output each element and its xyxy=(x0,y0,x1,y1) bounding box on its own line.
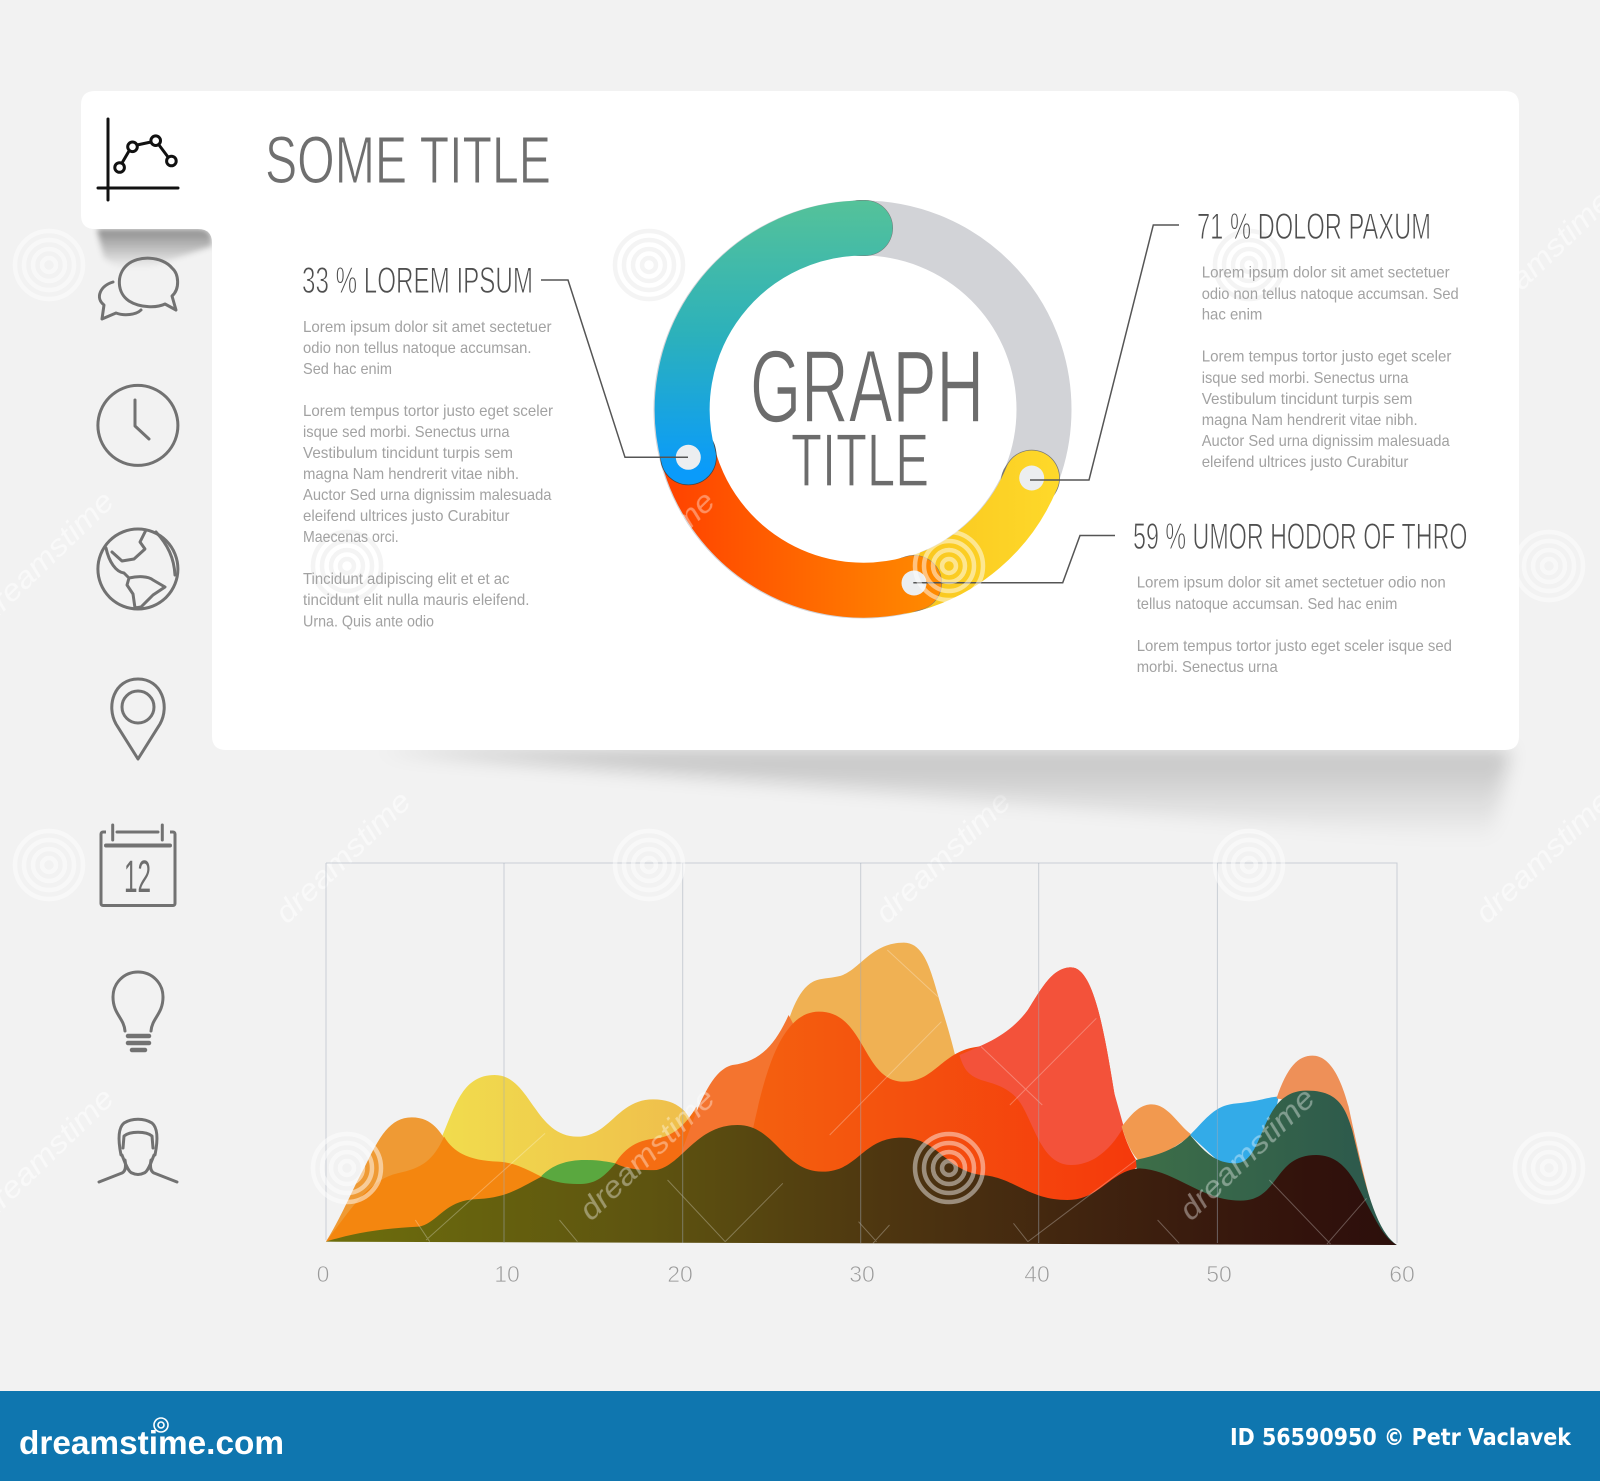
right callout: 59% umor hodor xyxy=(1133,516,1468,676)
area: orange mid xyxy=(610,1107,704,1173)
area: orange right peak xyxy=(1277,1056,1374,1213)
watermark xyxy=(15,231,1583,1227)
title word: TITLE xyxy=(791,418,929,502)
text block: left column: Urna. Quis ante odio xyxy=(303,614,434,630)
icon: globe xyxy=(98,529,178,609)
area: green overlap xyxy=(541,1160,616,1185)
panel: main card with selected tab xyxy=(81,91,1519,750)
text block: lower right column: tellus natoque accumsan. Sed hac enim xyxy=(1137,596,1397,613)
shadow under selected tab xyxy=(97,229,212,274)
area: light red orange xyxy=(675,1015,819,1173)
text block: left column: magna Nam hendrerit vitae nibh. xyxy=(303,466,519,483)
background watermark xyxy=(0,183,1600,1227)
text block: left column xyxy=(303,319,554,630)
icon: map pin xyxy=(112,679,164,759)
x axis labels: 60 xyxy=(1389,1261,1415,1287)
text block: upper right column: eleifend ultrices justo Curabitur xyxy=(1202,454,1409,471)
marker dots xyxy=(676,445,1044,596)
x axis labels: 40 xyxy=(1024,1261,1050,1287)
text block: left column: Lorem tempus tortor justo eget sceler xyxy=(303,403,554,420)
icon: clock xyxy=(98,385,178,465)
area: dark green xyxy=(1136,1091,1397,1245)
graph title xyxy=(750,329,984,502)
text block: lower right column: Lorem tempus tortor justo eget sceler isque sed xyxy=(1137,638,1452,655)
watermark: dreamstime xyxy=(572,1080,722,1227)
icon: speech bubbles xyxy=(99,258,178,319)
left callout: 33% lorem ipsum xyxy=(302,260,554,630)
area chart xyxy=(326,943,1397,1245)
heading: 71%: 71 % DOLOR PAXUM xyxy=(1197,206,1431,247)
text block: left column: isque sed morbi. Senectus urna xyxy=(303,424,510,441)
footer logo spiral xyxy=(154,1418,168,1432)
leader lines xyxy=(541,225,1179,583)
x axis labels: 10 xyxy=(494,1261,520,1287)
area: strong red orange xyxy=(750,967,1140,1207)
calendar date: 12 xyxy=(124,851,151,902)
text block: upper right column: Lorem ipsum dolor sit amet sectetuer xyxy=(1202,265,1450,282)
donut chart xyxy=(676,228,1044,595)
area: yellow xyxy=(441,1075,693,1180)
watermark strokes over chart xyxy=(415,950,1367,1244)
text block: upper right column xyxy=(1202,265,1459,471)
text block: upper right column: odio non tellus natoque accumsan. Sed xyxy=(1202,286,1459,303)
text block: upper right column: Vestibulum tincidunt turpis sem xyxy=(1202,391,1412,408)
heading: 33%: 33 % LOREM IPSUM xyxy=(302,260,533,301)
text block: left column: eleifend ultrices justo Curabitur xyxy=(303,508,510,525)
icon: line chart (selected) xyxy=(98,119,178,200)
segment: red to orange xyxy=(688,457,914,590)
text block: upper right column: magna Nam hendrerit vitae nibh. xyxy=(1202,412,1418,429)
footer bar xyxy=(0,1391,1600,1481)
right callout: 71% dolor paxum xyxy=(1197,206,1459,471)
area: light red peak xyxy=(959,967,1124,1165)
background watermark: dreamstime xyxy=(868,783,1018,930)
graph word: GRAPH xyxy=(750,329,984,444)
text block: left column: tincidunt elit nulla mauris eleifend. xyxy=(303,592,530,609)
area: orange xyxy=(326,1137,545,1242)
x axis labels: 50 xyxy=(1206,1261,1232,1287)
area: blue xyxy=(1190,1097,1279,1165)
footer logo: dreamstime.com xyxy=(19,1424,284,1461)
icon: person xyxy=(99,1119,177,1182)
text block: upper right column: Auctor Sed urna dignissim malesuada xyxy=(1202,433,1450,450)
background watermark: dreamstime xyxy=(268,783,418,930)
segment: green to blue xyxy=(682,228,865,457)
segment: yellow xyxy=(905,478,1032,586)
area: dark base xyxy=(326,1125,1397,1245)
text block: left column: Tincidunt adipiscing elit et et ac xyxy=(303,571,510,588)
text block: left column: Maecenas orci. xyxy=(303,529,399,546)
icon: calendar xyxy=(101,825,175,906)
title: SOME TITLE xyxy=(265,123,551,198)
chart grid frame xyxy=(326,863,1397,1243)
area: light orange xyxy=(326,1117,466,1242)
x axis labels: 0 xyxy=(317,1261,329,1287)
text block: upper right column: hac enim xyxy=(1202,307,1262,324)
text block: lower right column: morbi. Senectus urna xyxy=(1137,659,1278,676)
text block: left column: Lorem ipsum dolor sit amet sectetuer xyxy=(303,319,552,336)
x axis labels xyxy=(317,1261,1415,1287)
icon: light bulb xyxy=(113,972,163,1050)
area: orange small peak xyxy=(1122,1104,1192,1160)
text block: left column: Auctor Sed urna dignissim malesuada xyxy=(303,487,552,504)
text block: left column: Vestibulum tincidunt turpis sem xyxy=(303,445,513,462)
shadow under main card xyxy=(380,750,1510,842)
footer credit: ID 56590950 © Petr Vaclavek xyxy=(1230,1425,1572,1451)
watermark: dreamstime xyxy=(1172,1080,1322,1227)
text block: upper right column: Lorem tempus tortor justo eget sceler xyxy=(1202,349,1452,366)
watermark: dreamstime xyxy=(572,483,722,630)
area: pale orange peak xyxy=(781,943,967,1207)
text block: lower right column: Lorem ipsum dolor sit amet sectetuer odio non xyxy=(1137,575,1446,592)
text block: lower right column xyxy=(1137,575,1452,676)
segment: grey remainder xyxy=(681,228,1044,591)
text block: left column: odio non tellus natoque accumsan. xyxy=(303,340,532,357)
text block: upper right column: isque sed morbi. Senectus urna xyxy=(1202,370,1408,387)
text block: left column: Sed hac enim xyxy=(303,361,392,378)
card watermark xyxy=(313,231,1283,600)
x axis labels: 30 xyxy=(849,1261,875,1287)
x axis labels: 20 xyxy=(667,1261,693,1287)
